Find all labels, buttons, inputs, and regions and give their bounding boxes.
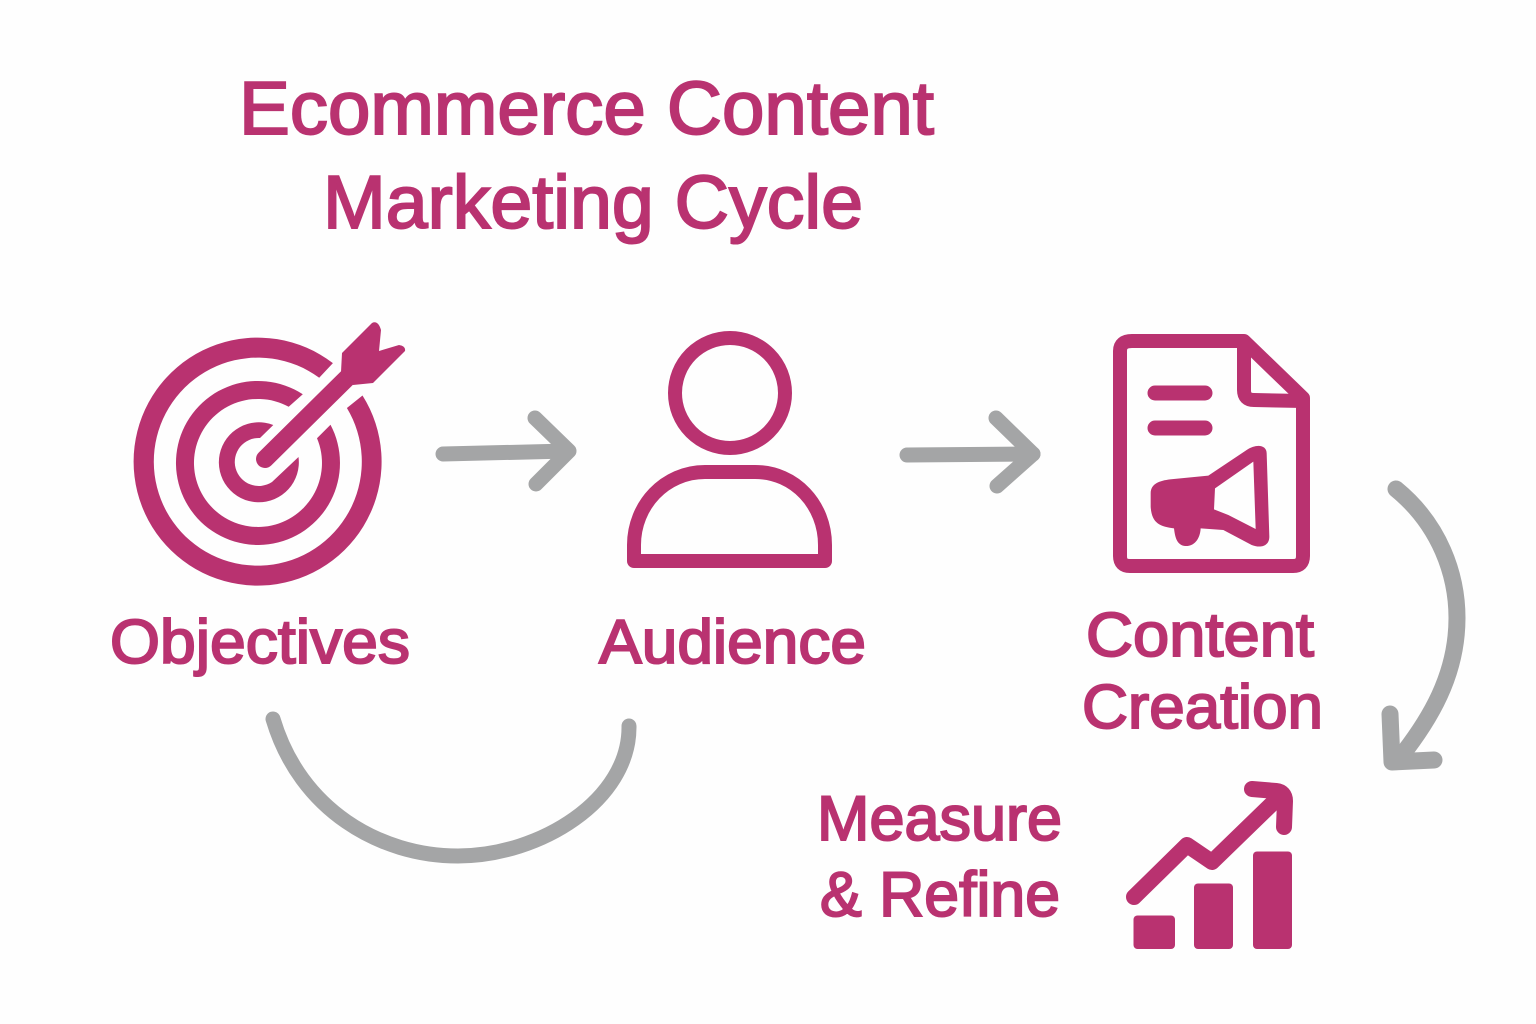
label: Measure & Refine: & Refine	[820, 860, 1060, 930]
arrow: objectives to audience	[443, 418, 569, 484]
label: Objectives: Objectives	[110, 608, 410, 677]
icon: person	[634, 338, 825, 561]
icon: target with arrow	[134, 322, 405, 586]
arrow: audience to content	[907, 418, 1033, 486]
label: Content Creation: Creation	[1082, 673, 1323, 742]
title: Ecommerce Content	[239, 66, 934, 150]
label: Content Creation: Content	[1086, 601, 1314, 670]
icon: document with megaphone	[1120, 341, 1303, 566]
label: Measure & Refine: Measure	[817, 784, 1062, 854]
label: Content Creation	[1082, 601, 1323, 742]
title	[239, 66, 934, 244]
arrow: content to measure	[1390, 489, 1457, 762]
label: Audience: Audience	[599, 608, 866, 677]
label: Measure & Refine	[817, 784, 1062, 930]
arrow: measure back to objectives	[273, 719, 629, 856]
icon: growth bar chart	[1134, 789, 1292, 949]
title: Marketing Cycle	[323, 160, 863, 244]
